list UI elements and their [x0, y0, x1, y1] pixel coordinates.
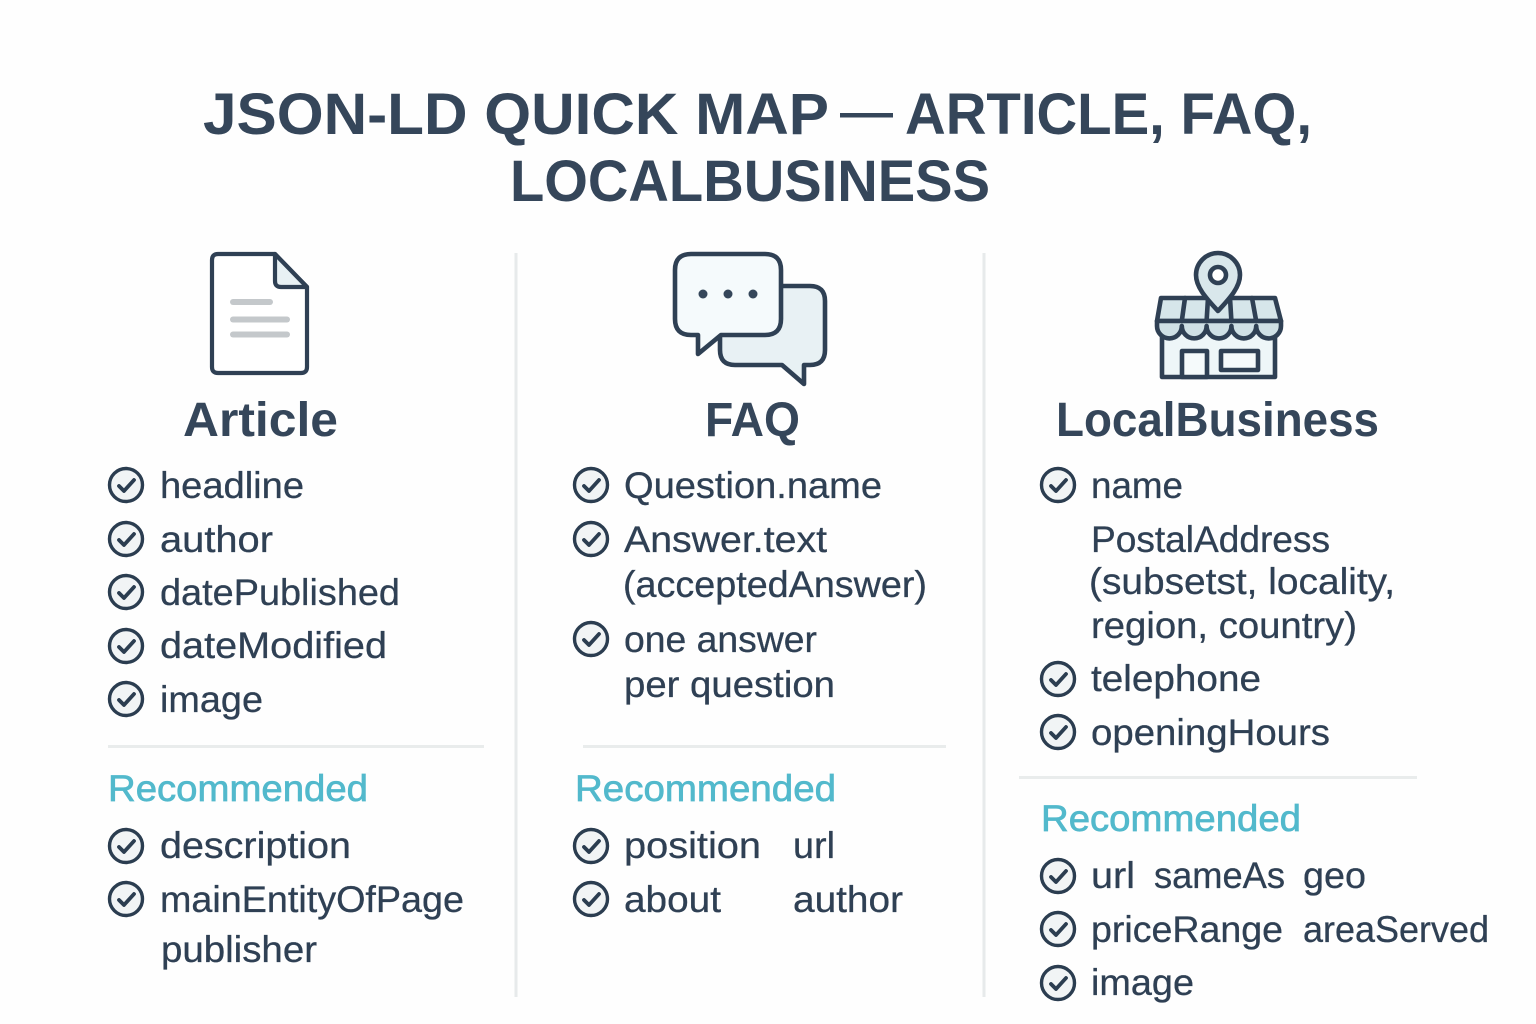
recommended list: Article: mainEntityOfPage — [160, 879, 464, 920]
recommended list: LocalBusiness: priceRange — [1091, 909, 1283, 950]
required list: FAQ: one answer — [624, 619, 817, 660]
title: JSON-LD QUICK MAP — [203, 82, 829, 147]
heading: FAQ: FAQ — [705, 394, 800, 447]
required list: LocalBusiness: openingHours — [1091, 712, 1330, 753]
required list: Article: image — [160, 679, 263, 720]
required list: Article: datePublished — [160, 572, 400, 613]
required list: LocalBusiness — [1042, 465, 1395, 753]
title — [203, 82, 1312, 214]
required list: Article: author — [160, 519, 273, 560]
recommended list: LocalBusiness: geo — [1303, 855, 1366, 896]
icon: document — [212, 254, 307, 373]
required list: Article: headline — [160, 465, 304, 506]
recommended list: LocalBusiness: sameAs — [1154, 855, 1285, 896]
recommended list: Article — [110, 825, 464, 970]
required list: FAQ: per question — [624, 664, 835, 705]
required list: Article — [110, 465, 400, 720]
panel: LocalBusiness — [1019, 253, 1489, 1003]
heading: Recommended (FAQ): Recommended — [575, 768, 836, 809]
recommended list: FAQ: position — [624, 825, 761, 866]
required list: FAQ — [574, 465, 927, 705]
recommended list: FAQ: url — [793, 825, 835, 866]
panel: FAQ — [574, 254, 946, 920]
recommended list: FAQ: author — [793, 879, 903, 920]
heading: Article: Article — [183, 394, 338, 447]
required list: LocalBusiness: (subsetst, locality, — [1089, 561, 1395, 602]
recommended list: LocalBusiness: image — [1091, 962, 1194, 1003]
heading: Recommended (LocalBusiness): Recommended — [1041, 798, 1301, 839]
icon: storefront with map pin — [1157, 253, 1281, 377]
required list: LocalBusiness: telephone — [1091, 658, 1261, 699]
recommended list: FAQ — [574, 825, 903, 920]
required list: FAQ: Answer.text — [624, 519, 828, 560]
required list: LocalBusiness: PostalAddress — [1091, 519, 1330, 560]
title: LOCALBUSINESS — [510, 149, 990, 214]
panel: Article — [108, 254, 484, 970]
required list: LocalBusiness: name — [1091, 465, 1183, 506]
required list: FAQ: (acceptedAnswer) — [623, 564, 927, 605]
required list: Article: dateModified — [160, 625, 387, 666]
recommended list: LocalBusiness: url — [1091, 855, 1135, 896]
required list: FAQ: Question.name — [624, 465, 882, 506]
title: ARTICLE, FAQ, — [905, 82, 1312, 147]
icon: chat bubbles — [675, 254, 825, 384]
recommended list: LocalBusiness: areaServed — [1303, 909, 1489, 950]
column dividers — [514, 253, 986, 997]
heading: LocalBusiness: LocalBusiness — [1056, 394, 1379, 447]
recommended list: Article: publisher — [161, 929, 317, 970]
recommended list: Article: description — [160, 825, 351, 866]
heading: Recommended (Article): Recommended — [108, 768, 368, 809]
required list: LocalBusiness: region, country) — [1091, 605, 1357, 646]
recommended list: LocalBusiness — [1042, 855, 1489, 1003]
recommended list: FAQ: about — [624, 879, 722, 920]
